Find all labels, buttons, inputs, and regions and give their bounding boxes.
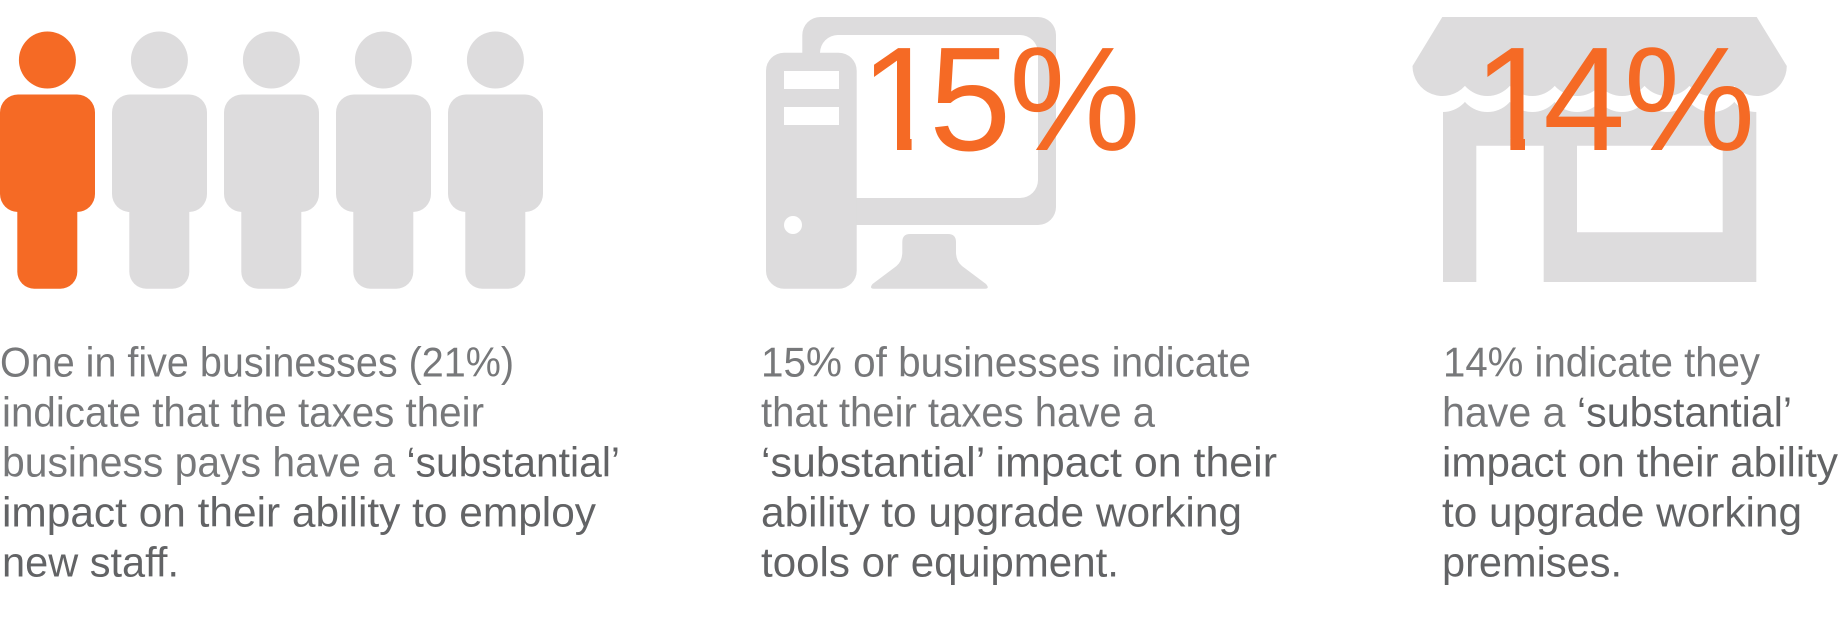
stat: 15%	[874, 47, 1136, 152]
text block: employ new staff description: business pays have a ‘substantial’	[2, 439, 620, 486]
text block: premises description: impact on their ability	[1442, 439, 1838, 486]
icon: tower case	[766, 53, 857, 289]
text block: employ new staff description: indicate that the taxes their	[2, 389, 484, 436]
icon: grey person 4	[336, 32, 431, 289]
stat: 14%	[1487, 47, 1750, 151]
stat: 14%: 4%	[1543, 17, 1755, 182]
icon: shop front	[1400, 10, 1800, 282]
icon: grey person 3	[224, 32, 319, 289]
text block: premises description: premises.	[1442, 538, 1622, 585]
icon: gap under awning	[1400, 10, 1800, 112]
panel: employ new staff	[0, 32, 620, 585]
icon: grey person 5	[448, 32, 543, 289]
text block: tools and equipment description: ‘substantial’ impact on their	[761, 439, 1277, 486]
panel: upgrade tools or equipment	[761, 17, 1277, 585]
panel: upgrade working premises	[1400, 10, 1838, 585]
text block: premises description	[1442, 339, 1838, 585]
text block: tools and equipment description: 15% of businesses indicate	[761, 339, 1251, 386]
icon: desktop computer	[766, 17, 1056, 289]
icon: row of five people, one highlighted	[0, 32, 543, 289]
icon: monitor stand	[871, 234, 988, 289]
icon: highlighted person	[0, 32, 95, 289]
text block: premises description: to upgrade working	[1442, 489, 1802, 536]
text block: employ new staff description: impact on their ability to employ	[2, 489, 596, 536]
icon: scalloped awning	[1412, 17, 1787, 96]
text block: employ new staff description	[0, 339, 620, 585]
icon: grey person 2	[112, 32, 207, 289]
text block: premises description: have a ‘substantial’	[1442, 389, 1792, 436]
text block: premises description: 14% indicate they	[1443, 339, 1760, 386]
stat: 15%: 1	[860, 17, 942, 182]
icon: monitor	[802, 17, 1056, 225]
icon: shop building	[1443, 80, 1756, 282]
text block: employ new staff description: new staff.	[2, 538, 179, 585]
text block: employ new staff description: One in five businesses (21%)	[0, 339, 514, 386]
text block: tools and equipment description: tools or equipment.	[761, 538, 1119, 585]
stat: 15%: 5%	[929, 17, 1141, 182]
stat: 14%: 1	[1473, 17, 1556, 182]
text block: tools and equipment description	[761, 339, 1277, 585]
text block: tools and equipment description: that their taxes have a	[761, 389, 1156, 436]
text block: tools and equipment description: ability to upgrade working	[761, 489, 1242, 536]
